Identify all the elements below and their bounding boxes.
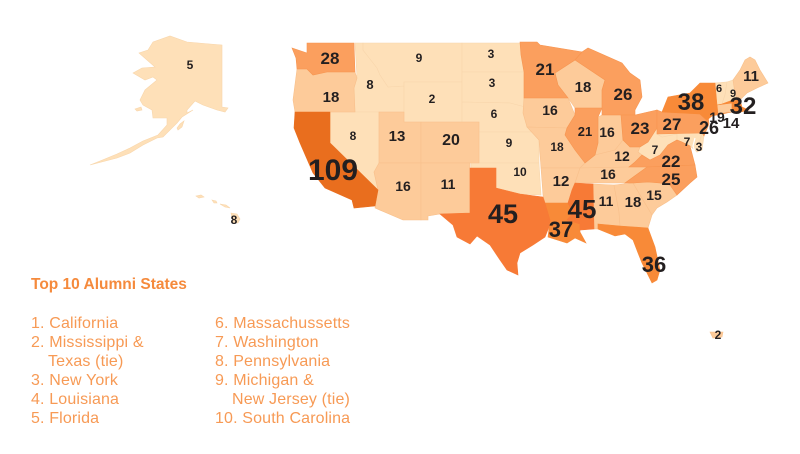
state value labels: 26 — [614, 85, 632, 104]
state value labels: 5 — [187, 58, 194, 72]
state value labels: 109 — [308, 154, 358, 187]
state value labels: 38 — [678, 89, 704, 116]
state value labels: 45 — [488, 199, 518, 229]
state value labels: 27 — [663, 115, 681, 134]
state value labels: 12 — [553, 173, 569, 190]
state value labels: 12 — [614, 148, 630, 164]
state value labels: 8 — [350, 129, 357, 143]
state value labels: 9 — [416, 51, 423, 65]
state value labels: 11 — [599, 193, 614, 209]
state value labels: 22 — [662, 152, 680, 171]
state value labels: 20 — [442, 132, 460, 149]
state value labels: 16 — [542, 102, 558, 118]
state value labels: 11 — [743, 68, 759, 85]
state value labels: 14 — [723, 115, 740, 132]
state value labels: 3 — [488, 47, 495, 61]
state value labels: 18 — [575, 79, 591, 96]
state value labels: 6 — [716, 83, 722, 95]
list: ranks 6 to 10: New Jersey (tie) — [232, 391, 350, 408]
state value labels: 26 — [699, 118, 719, 138]
state value labels: 2 — [715, 328, 722, 342]
Chesapeake Bay — [693, 138, 696, 155]
state value labels: 15 — [646, 187, 662, 203]
state value labels: 36 — [642, 252, 666, 277]
Alaska islands — [135, 107, 142, 111]
list: ranks 6 to 10 — [215, 315, 350, 427]
state value labels: 8 — [366, 77, 374, 92]
state value labels: 21 — [578, 124, 592, 139]
state value labels: 6 — [491, 107, 498, 121]
list: ranks 6 to 10: 7. Washington — [215, 334, 319, 351]
Alaska — [90, 36, 228, 165]
list: ranks 1 to 5: 3. New York — [31, 372, 119, 389]
state value labels: 21 — [536, 60, 554, 79]
state value labels: 10 — [513, 165, 527, 179]
state value labels: 11 — [441, 176, 456, 192]
state value labels: 18 — [323, 89, 339, 106]
state value labels: 32 — [730, 93, 756, 120]
list: ranks 1 to 5: 4. Louisiana — [31, 391, 119, 408]
heading: Top 10 Alumni States: Top 10 Alumni States — [31, 276, 187, 293]
state value labels: 2 — [429, 92, 436, 106]
list: ranks 1 to 5 — [31, 315, 144, 427]
state value labels: 25 — [662, 170, 680, 189]
list: ranks 1 to 5: 2. Mississippi & — [31, 334, 144, 351]
state value labels: 7 — [684, 135, 691, 149]
state value labels: 23 — [631, 119, 649, 138]
state value labels: 28 — [321, 49, 339, 68]
list: ranks 6 to 10: 6. Massachussetts — [215, 315, 350, 332]
state value labels: 18 — [625, 194, 641, 211]
state value labels: 16 — [600, 166, 616, 182]
state value labels: 9 — [506, 136, 513, 150]
list: ranks 6 to 10: 8. Pennsylvania — [215, 353, 330, 370]
state value labels: 9 — [730, 88, 736, 100]
list: ranks 1 to 5: 1. California — [31, 315, 118, 332]
state value labels — [187, 47, 759, 342]
map: alumni by state — [90, 36, 768, 342]
list: ranks 6 to 10: 9. Michigan & — [215, 372, 314, 389]
state value labels: 8 — [231, 213, 238, 227]
state value labels: 3 — [696, 140, 703, 154]
state value labels: 3 — [489, 76, 496, 90]
list: ranks 6 to 10: 10. South Carolina — [215, 410, 350, 427]
state value labels: 16 — [599, 124, 615, 140]
state value labels: 19 — [709, 109, 725, 125]
list: ranks 1 to 5: 5. Florida — [31, 410, 99, 427]
Puerto Rico — [710, 332, 723, 338]
state value labels: 18 — [550, 140, 564, 154]
state value labels: 13 — [389, 128, 405, 145]
state value labels: 16 — [395, 178, 411, 194]
Hawaii — [196, 195, 240, 223]
list: ranks 1 to 5: Texas (tie) — [48, 353, 123, 370]
state value labels: 45 — [568, 194, 596, 224]
state value labels: 7 — [652, 143, 659, 157]
state value labels: 37 — [549, 217, 573, 242]
